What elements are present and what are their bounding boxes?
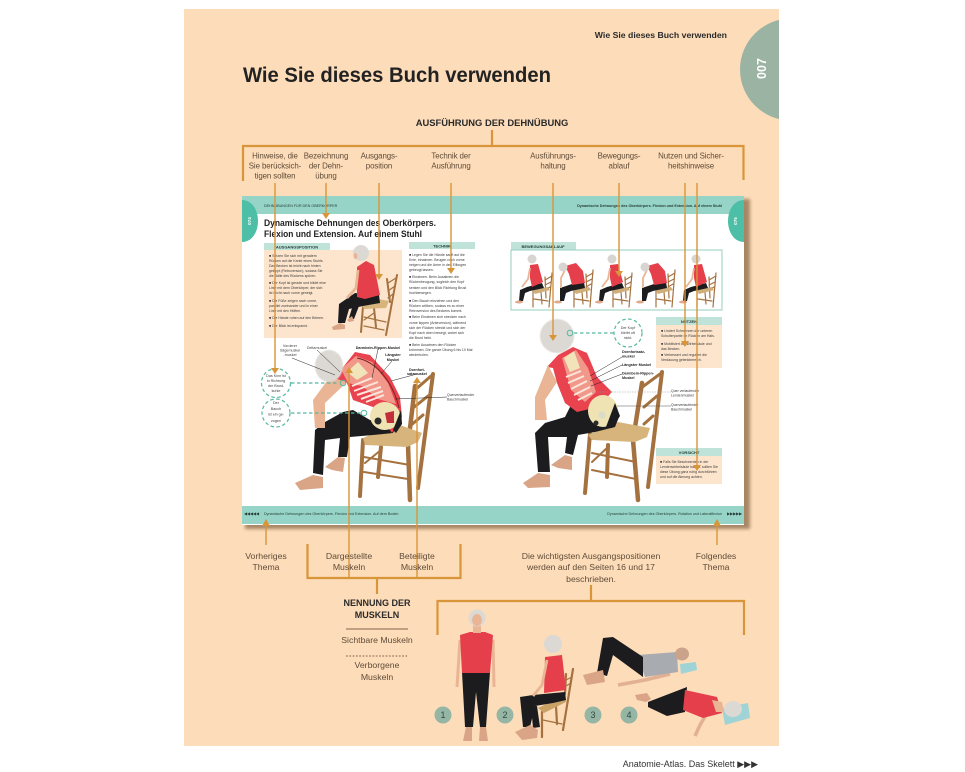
panel: Vorsicht: und auf die Atmung achten. <box>660 475 703 479</box>
panel: Technik: Kopf nach oben bewegt, wobei sich <box>409 331 464 335</box>
panel: Ausgangsposition: gekippt (Retroversion), sodass Sie <box>269 269 323 273</box>
arrows from the top labels <box>271 183 701 471</box>
right page tab <box>728 200 744 242</box>
top column labels: Ausgangs- <box>361 152 398 160</box>
panel: book spread <box>242 196 750 529</box>
bottom teal band: Dynamische Dehnungen des Oberkörpers. Rotation und Lateralflexion <box>607 512 722 516</box>
panel: Ausgangsposition: ist leicht nach vorne geneigt. <box>269 291 313 295</box>
top column labels: übung <box>315 172 337 180</box>
muscle labels left: Bauchmuskel <box>447 398 468 402</box>
top teal band: Dynamische Dehnungen des Oberkörpers. Flexion und Extension. Auf einem Stuhl <box>577 204 722 208</box>
bottom labels: Muskeln <box>401 562 433 572</box>
top column labels: tigen sollten <box>255 172 295 180</box>
top column labels: Technik der <box>431 152 471 160</box>
figure: seated woman, starting position <box>332 245 397 335</box>
title: Wie Sie dieses Buch verwenden <box>243 64 551 87</box>
callout: dashed circle right: Der Kopf <box>621 326 636 330</box>
panel: Technik: Retroversion des Beckens kommt. <box>409 309 462 313</box>
position number badges: 4 <box>626 710 632 720</box>
position number badges <box>434 706 638 724</box>
top teal band <box>242 196 744 214</box>
legend: muscle naming: Muskeln <box>361 672 393 682</box>
panel: Technik: wiederholen. <box>409 353 429 357</box>
panel: Ausgangsposition: ■ Der Kopf ist gerade und bildet eine <box>269 281 326 285</box>
panel: Ausgangsposition: ■ Die Hände ruhen auf den Beinen. <box>269 316 324 320</box>
bracket: starting positions <box>438 585 744 635</box>
panel: Nutzen: ■ Mobilisiert die Wirbelsäule und <box>661 342 712 346</box>
callout: dashed circles left: Bauch <box>271 407 281 411</box>
muscle labels left <box>280 344 475 402</box>
muscle labels right: muskel <box>622 354 635 358</box>
muscle labels left: Muskel <box>387 358 399 362</box>
bottom labels: Dargestellte <box>326 551 372 561</box>
callout: dashed circles left: ist ein ge- <box>268 412 285 416</box>
legend: muscle naming: MUSKELN <box>355 610 399 620</box>
figure 3: lying, knees bent <box>583 637 697 685</box>
panel: Technik: gebeugt lassen. <box>409 268 434 272</box>
legend: muscle naming: Verborgene <box>355 660 400 670</box>
muscle labels right: Darmbein-Rippen- <box>622 372 655 376</box>
panel: Ausgangsposition: AUSGANGSPOSITION <box>276 244 318 250</box>
bottom labels: werden auf den Seiten 16 und 17 <box>526 562 655 572</box>
panel: Nutzen: Verdauung gelenkbereich. <box>661 358 702 362</box>
panel: Ausgangsposition: ■ Setzen Sie sich mit geradem <box>269 254 317 258</box>
panel: Technik <box>409 242 475 357</box>
top column labels: heitshinweise <box>668 162 715 170</box>
position number badges: 1 <box>440 710 446 720</box>
panel: Ausgangsposition: Das Becken ist leicht nach hinten <box>269 264 321 268</box>
muscle labels left: satzmuskel <box>407 372 427 376</box>
panel: Technik: ■ Beim Ausatmen den Rücken <box>409 343 456 347</box>
footer: Anatomie-Atlas. Das Skelett ▶▶▶ <box>623 759 758 769</box>
panel: Nutzen: NUTZEN <box>681 319 697 324</box>
panel: Ausgangsposition <box>264 243 402 338</box>
panel: Vorsicht <box>656 448 722 484</box>
callout: dashed circle right: bleibt oft <box>621 331 635 335</box>
top column labels: der Dehn- <box>309 162 344 170</box>
panel: Technik: vorne kippen (Anteversion), während <box>409 321 466 325</box>
bottom teal band <box>242 506 744 524</box>
corner page number tab: 007 <box>755 58 769 79</box>
left page tab: 074 <box>247 217 252 225</box>
panel: Nutzen: ■ Lindert Schmerzen der unteren <box>661 329 712 333</box>
panel: Ausgangsposition: ■ Der Blick ist entspannt. <box>269 324 308 328</box>
figure 1: standing <box>457 610 494 741</box>
top teal band: DEHNÜBUNGEN FÜR DEN OBERKÖRPER <box>264 204 338 208</box>
panel: Ausgangsposition: Linie mit dem Oberkörper, der sich <box>269 286 323 290</box>
top column labels: Bezeichnung <box>304 152 348 160</box>
bottom labels: Folgendes <box>696 551 737 561</box>
bottom teal band: ▶▶▶▶▶ <box>727 511 743 516</box>
muscle labels right: Bauchmuskel <box>671 408 692 412</box>
arrows: previous and next topic <box>262 519 721 545</box>
panel: Vorsicht: VORSICHT <box>679 450 700 455</box>
muscle labels right: Quer verlaufender <box>671 389 700 393</box>
panel: page background <box>184 9 779 746</box>
exercise title: Flexion und Extension. Auf einem Stuhl <box>264 229 422 239</box>
top column labels: Ausführung <box>431 162 471 170</box>
panel: Nutzen: Schulterpartie im Rücken am Hals. <box>661 334 715 338</box>
panel: Technik: ■ Einatmen. Beim Ausatmen die <box>409 275 459 279</box>
bottom labels: Vorheriges <box>245 551 287 561</box>
panel: Bewegungsablauf: BEWEGUNGSABLAUF <box>521 244 565 249</box>
bottom teal band: Dynamische Dehnungen des Oberkörpers. Flexion und Extension. Auf dem Boden <box>264 512 398 516</box>
muscle labels right: Lendenmuskel <box>671 394 694 398</box>
heading: Ausführung der Dehnübung: AUSFÜHRUNG DER DEHNÜBUNG <box>416 117 568 128</box>
position number badges: 3 <box>590 710 596 720</box>
panel: Nutzen <box>656 317 722 368</box>
left page tab <box>242 200 258 242</box>
panel: Bewegungsablauf <box>511 242 722 310</box>
callout: dashed circles left: Der <box>273 401 280 405</box>
muscle labels right: Muskel <box>622 376 635 380</box>
muscle labels left: Längster <box>385 353 401 357</box>
muscle labels left: Querverlaufender <box>447 393 475 397</box>
running head: Wie Sie dieses Buch verwenden <box>595 30 727 40</box>
top bracket <box>243 130 744 181</box>
muscle labels right: Längster Muskel <box>622 363 651 367</box>
panel: Ausgangsposition: Linie mit den Hüften. <box>269 309 301 313</box>
bottom labels: Muskeln <box>333 562 365 572</box>
callout: dashed circles left <box>262 368 367 427</box>
muscle labels right <box>622 350 700 412</box>
panel: Technik: krümmen. Die ganze Übung 6 bis 10 Mal <box>409 348 473 352</box>
panel: Technik: Rückenbeugung, sogleich den Kopf <box>409 280 464 284</box>
bottom labels: beschrieben. <box>566 574 616 584</box>
top column labels: Ausführungs- <box>530 152 576 160</box>
top column labels <box>249 152 724 180</box>
panel: Technik: senken und den Blick Richtung Brust <box>409 286 466 290</box>
figure 4: lying, twisted <box>635 687 750 736</box>
panel: Technik: ■ Beim Einatmen sich strecken nach <box>409 315 466 319</box>
panel: Ausgangsposition: parallel zueinander und in einer <box>269 304 319 308</box>
position number badges: 2 <box>502 710 508 720</box>
panel: Vorsicht: ■ Falls Sie Beschwerden in der <box>660 460 709 464</box>
bottom labels: Beteiligte <box>399 551 435 561</box>
callout: dashed circles left: zogen <box>271 419 281 423</box>
top column labels: Hinweise, die <box>252 152 299 160</box>
muscle labels left: Vorderer <box>283 344 298 348</box>
muscle labels left: -muskel <box>284 353 297 357</box>
callout: dashed circles left: kuhle <box>272 389 280 393</box>
panel: Technik: hochbewegen. <box>409 291 432 295</box>
sequence figures <box>515 254 716 307</box>
bottom teal band: ◀◀◀◀◀ <box>244 511 260 516</box>
top column labels: Nutzen und Sicher- <box>658 152 724 160</box>
callout: dashed circles left: Das Kinn ist <box>266 374 286 378</box>
right page tab: 075 <box>733 217 738 225</box>
panel: Technik: ■ Legen Sie die Hände sanft auf die <box>409 253 465 257</box>
figure 2: seated <box>515 635 573 740</box>
panel: Ausgangsposition: ■ Die Füße zeigen nach vorne, <box>269 299 317 303</box>
panel: Technik: die Brust hebt. <box>409 336 432 340</box>
muscle labels left: Sägemuskel <box>280 348 300 352</box>
muscle labels right: Querverlaufender <box>671 403 699 407</box>
panel: Technik: ■ Den Bauch einziehen und den <box>409 299 459 303</box>
panel: Ausgangsposition: Rücken auf die Kante eines Stuhls. <box>269 259 324 263</box>
exercise title: Dynamische Dehnungen des Oberkörpers. <box>264 218 436 228</box>
muscle labels right: Dornfortsatz- <box>622 350 646 354</box>
bottom bracket: muscles <box>308 367 460 594</box>
callout: dashed circle right <box>567 319 642 347</box>
panel: Nutzen: ■ Verbessert und reguliert die <box>661 353 707 357</box>
callout: dashed circles left: der Brust- <box>268 384 285 388</box>
bottom labels: Die wichtigsten Ausgangspositionen <box>522 551 660 561</box>
panel: Technik: TECHNIK <box>433 244 451 248</box>
top column labels: Sie berücksich- <box>249 162 302 170</box>
muscle labels left: Deltamuskel <box>307 346 327 350</box>
exercise title <box>264 218 436 239</box>
panel: Technik: Knie, einatmen. Beugen nach vorne <box>409 258 465 262</box>
panel: Technik: Rücken wölben, sodass es zu einer <box>409 304 465 308</box>
legend: muscle naming <box>341 598 413 682</box>
corner page number tab <box>740 20 779 120</box>
muscle labels left: Darmbein-Rippen-Muskel <box>356 346 400 350</box>
figure: extended back with anatomy <box>523 319 671 500</box>
bottom labels: Thema <box>252 562 280 572</box>
figure: bent forward with anatomy <box>292 349 447 500</box>
muscle labels left: Dornfort- <box>409 368 426 372</box>
callout: dashed circle right: nickt. <box>624 336 632 340</box>
panel: Technik: neigen und die Arme in den Ellbogen <box>409 263 466 267</box>
top column labels: ablauf <box>609 162 630 170</box>
top column labels: position <box>366 162 392 170</box>
callout: dashed circles left: in Richtung <box>267 379 285 383</box>
panel: Ausgangsposition: die Bälle des Rückens spüren. <box>269 274 316 278</box>
legend: muscle naming: NENNUNG DER <box>343 598 411 608</box>
top column labels: haltung <box>540 162 566 170</box>
bottom labels: Thema <box>702 562 730 572</box>
top column labels: Bewegungs- <box>598 152 641 160</box>
panel: Vorsicht: diese Übung ganz ruhig durchführen <box>660 470 717 474</box>
legend: muscle naming: Sichtbare Muskeln <box>341 635 413 645</box>
bottom labels <box>245 551 737 584</box>
panel: Vorsicht: Lendenwirbelsäule haben, sollten Sie <box>660 465 718 469</box>
panel: Nutzen: das Becken. <box>661 347 680 351</box>
panel: Technik: sich der Rücken streckt und sich der <box>409 326 466 330</box>
